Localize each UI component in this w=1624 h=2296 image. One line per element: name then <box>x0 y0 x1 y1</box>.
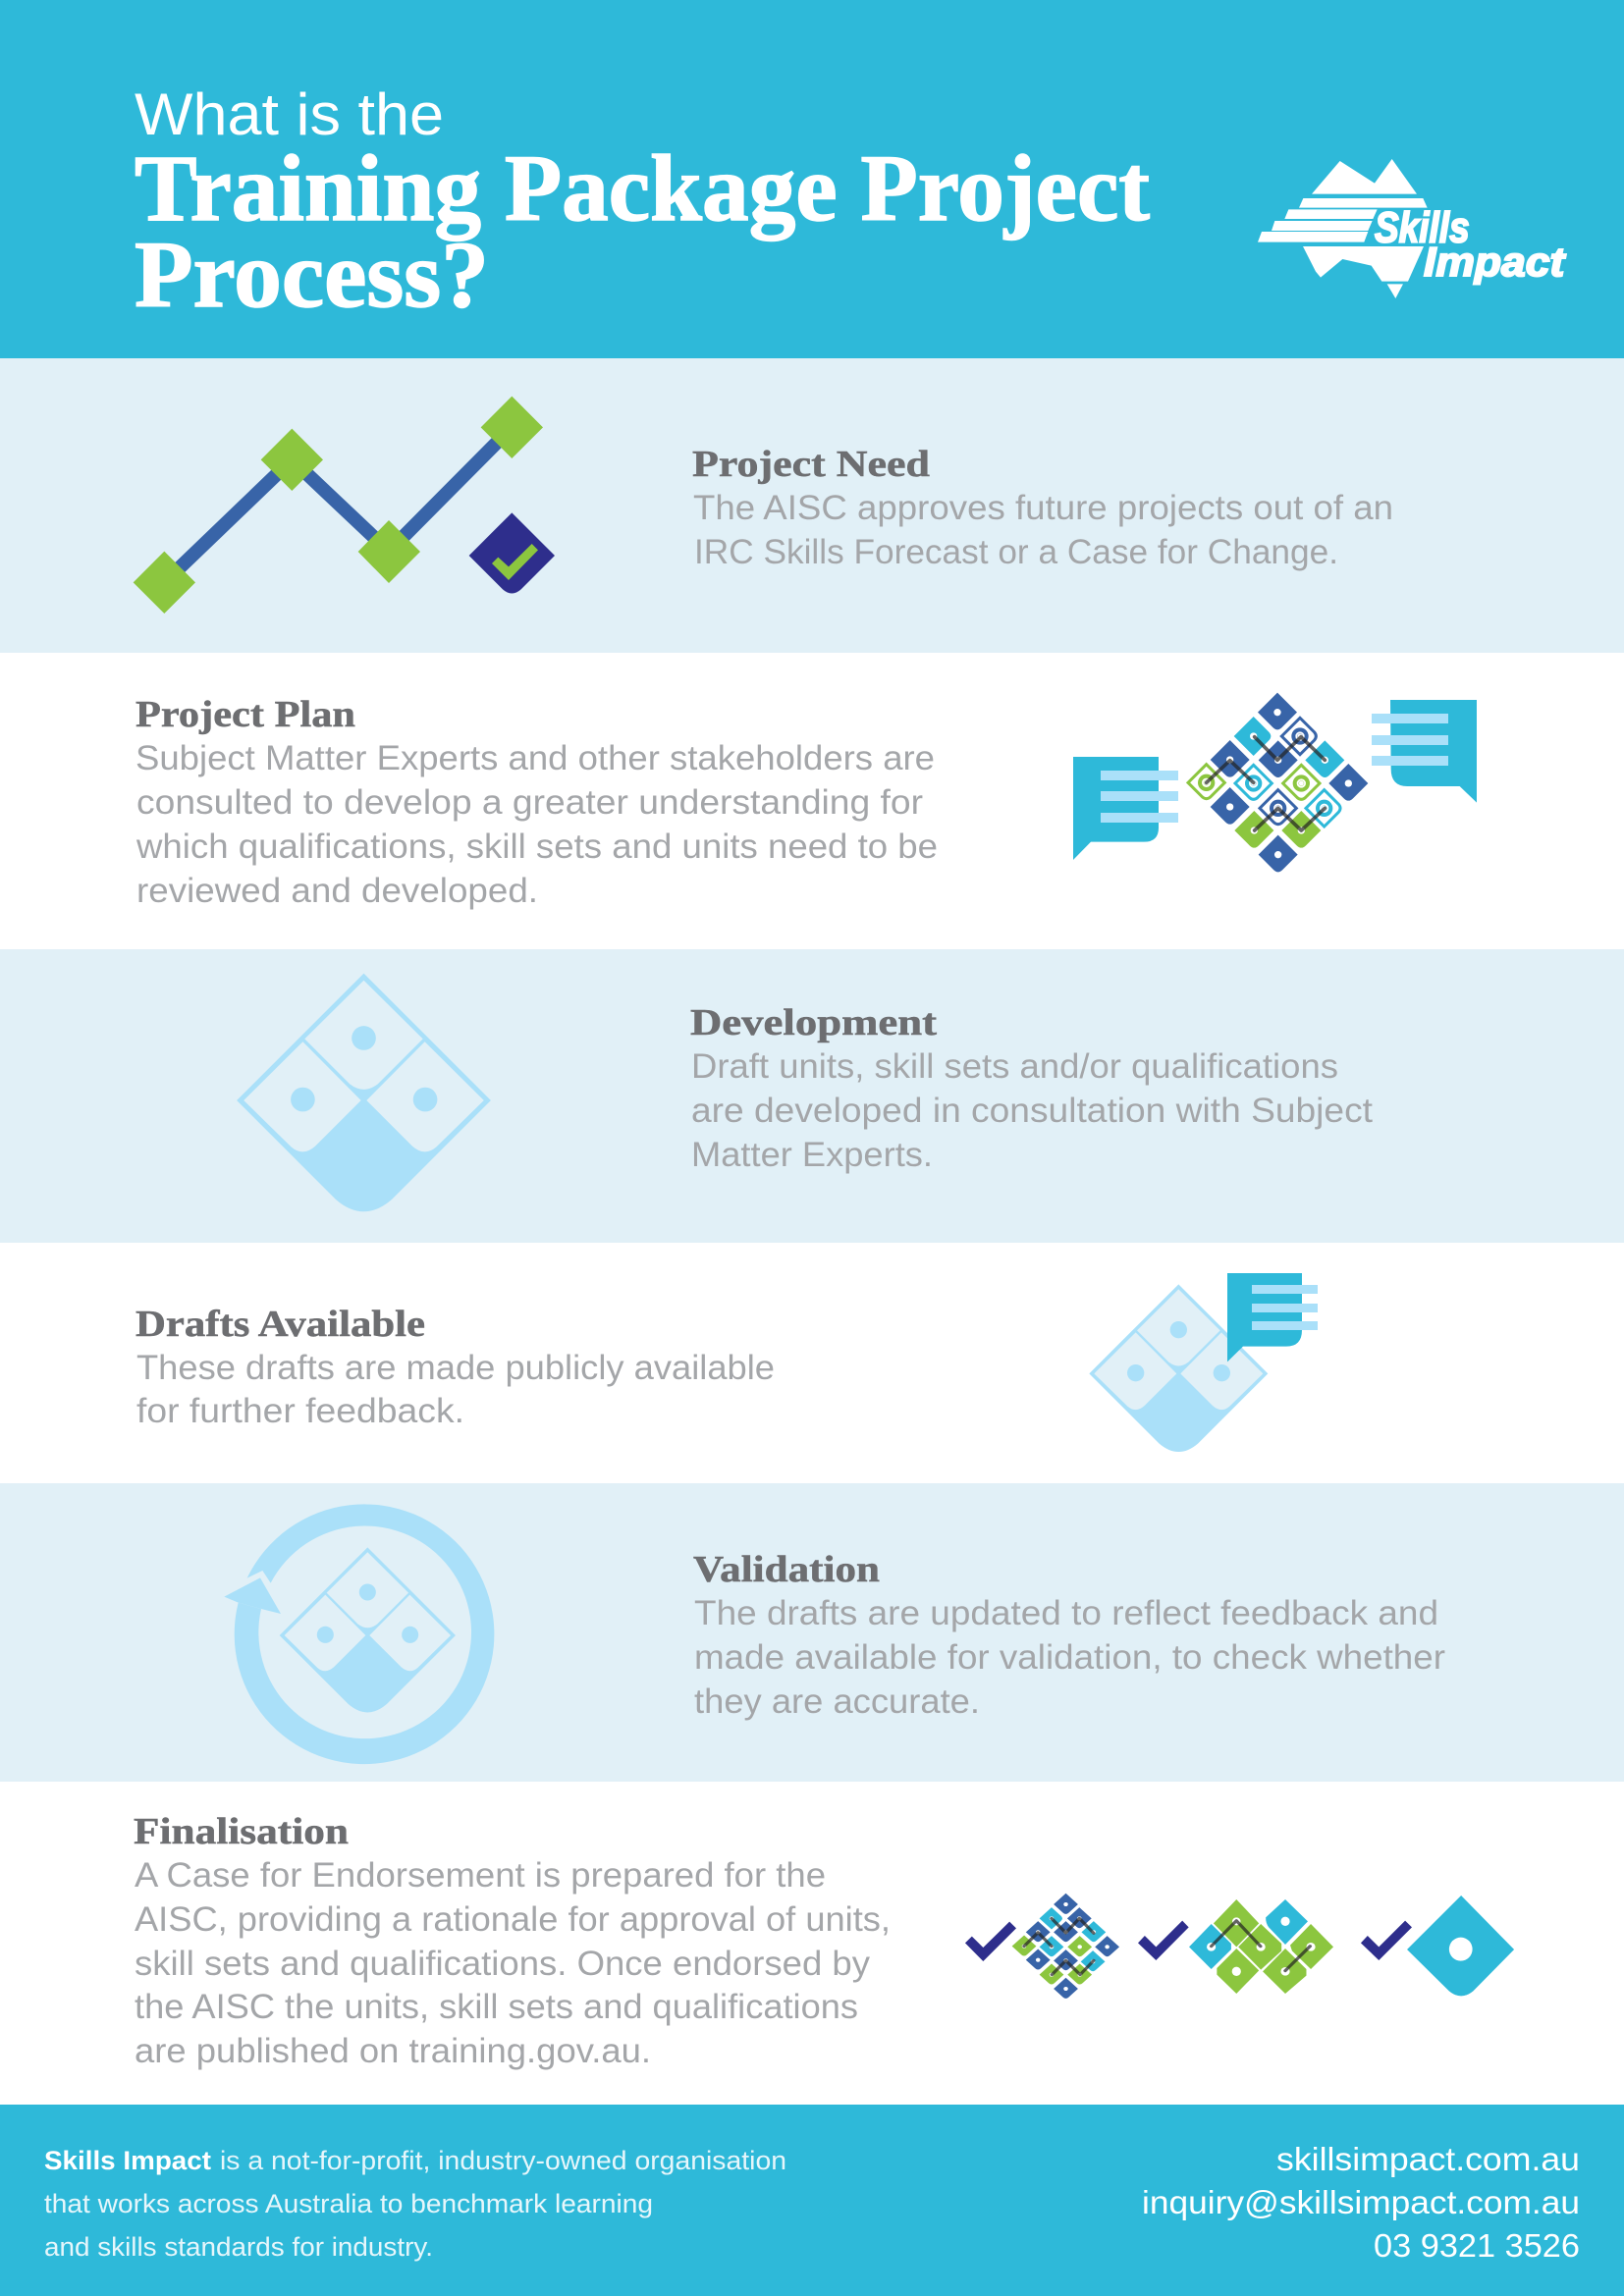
heading: finalisation: Finalisation <box>134 1811 349 1852</box>
text: project plan: reviewed and developed. <box>136 872 538 910</box>
icon: check and partial diamond grid <box>1138 1899 1333 1994</box>
text: drafts available: These drafts are made publicly available <box>136 1349 775 1387</box>
diamond grid <box>1188 693 1368 872</box>
text: development: Draft units, skill sets and/or qualifications <box>691 1047 1338 1086</box>
heading: validation: Validation <box>693 1549 880 1590</box>
heading: development: Development <box>690 1002 937 1043</box>
text: contact details: inquiry@skillsimpact.com.au <box>1142 2184 1580 2220</box>
text: project plan: Subject Matter Experts and other stakeholders are <box>135 739 935 777</box>
icon: diamond with speech bubble <box>1089 1273 1318 1452</box>
text: about Skills Impact <box>44 2146 786 2262</box>
text: project plan: consulted to develop a greater understanding for <box>136 783 923 822</box>
logo: Skills Impact <box>1258 159 1567 298</box>
panel: development <box>0 949 1624 1243</box>
text: project need: The AISC approves future projects out of an <box>693 489 1393 527</box>
panel: validation <box>0 1483 1624 1782</box>
panel: project need <box>0 358 1624 653</box>
icon: trend line with check <box>134 397 555 614</box>
panel: drafts available <box>0 1243 1624 1483</box>
text: project need <box>693 489 1393 571</box>
icon: three-cell diamond <box>237 974 491 1211</box>
text: about Skills Impact: that works across Australia to benchmark learning <box>44 2189 653 2218</box>
text: contact details: 03 9321 3526 <box>1374 2227 1580 2264</box>
logo: Skills Impact: Skills <box>1375 204 1470 252</box>
icons: endorsed checkmarks and diamonds <box>965 1894 1514 1999</box>
text: about Skills Impact: is a not-for-profit, industry-owned organisation <box>220 2146 786 2175</box>
left speech bubble <box>1073 757 1178 860</box>
text: validation: The drafts are updated to reflect feedback and <box>694 1594 1438 1632</box>
text: finalisation <box>135 1856 891 2070</box>
text: validation <box>694 1594 1445 1721</box>
icon: consultation diamonds and speech bubbles <box>1073 693 1477 872</box>
text: finalisation: the AISC the units, skill sets and qualifications <box>135 1988 858 2026</box>
text: drafts available <box>136 1349 775 1430</box>
header banner <box>0 0 1624 358</box>
footer <box>0 2105 1624 2296</box>
heading: drafts available: Drafts Available <box>135 1304 425 1345</box>
title: Process? <box>135 222 489 327</box>
text: finalisation: AISC, providing a rationale for approval of units, <box>135 1900 891 1939</box>
text: about Skills Impact: and skills standards for industry. <box>44 2232 433 2262</box>
text: finalisation: are published on training.gov.au. <box>135 2032 651 2070</box>
icon: check and single diamond <box>1361 1896 1514 1996</box>
right speech bubble <box>1372 700 1477 803</box>
text: development: are developed in consultation with Subject <box>691 1092 1373 1130</box>
panel: project plan <box>0 653 1624 949</box>
text: finalisation: A Case for Endorsement is prepared for the <box>135 1856 826 1895</box>
text: contact details <box>1142 2141 1580 2264</box>
heading: project plan: Project Plan <box>135 694 355 735</box>
panel: finalisation <box>0 1782 1624 2105</box>
heading: project need: Project Need <box>692 444 930 485</box>
text: project plan <box>135 739 938 910</box>
title: What is the <box>135 81 444 147</box>
text: validation: made available for validation, to check whether <box>694 1638 1445 1677</box>
icon: check and full diamond grid <box>965 1894 1119 1999</box>
logo: Skills Impact: Impact <box>1424 239 1567 285</box>
text: development: Matter Experts. <box>691 1136 933 1174</box>
icon: diamond in circular arrow <box>224 1504 494 1764</box>
text: development <box>691 1047 1373 1174</box>
title <box>135 81 1150 327</box>
text: drafts available: for further feedback. <box>136 1392 464 1430</box>
text: project need: IRC Skills Forecast or a Case for Change. <box>694 533 1338 571</box>
text: about Skills Impact: Skills Impact <box>44 2146 211 2175</box>
text: finalisation: skill sets and qualifications. Once endorsed by <box>135 1945 871 1983</box>
text: contact details: skillsimpact.com.au <box>1276 2141 1580 2177</box>
title: Training Package Project <box>135 135 1150 240</box>
text: validation: they are accurate. <box>694 1682 980 1721</box>
text: project plan: which qualifications, skill sets and units need to be <box>135 828 938 866</box>
